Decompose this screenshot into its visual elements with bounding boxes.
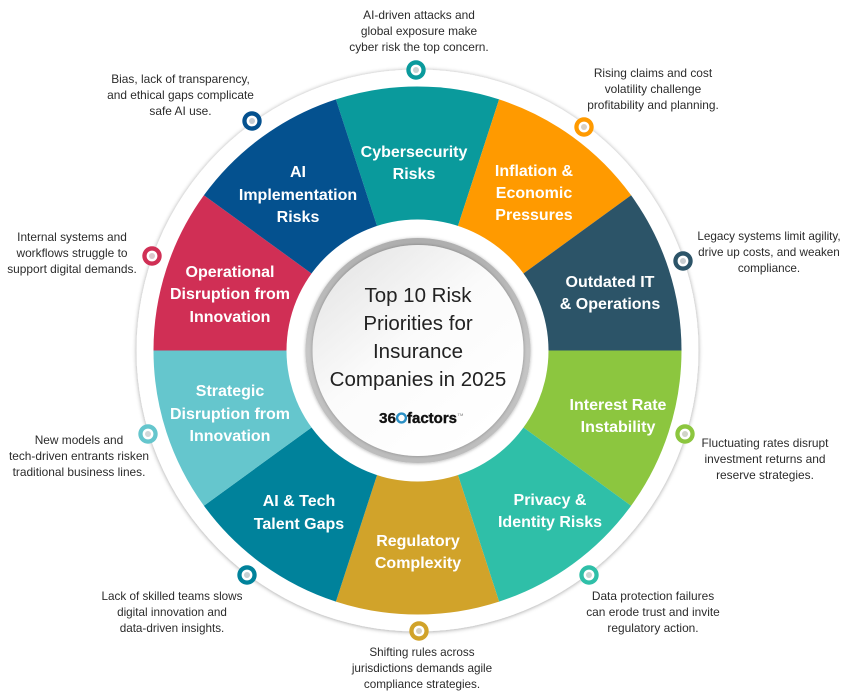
text: Regulatory: jurisdictions demands agile: [351, 662, 492, 675]
dot: Privacy: [579, 565, 599, 585]
text: Privacy: regulatory action.: [607, 621, 699, 635]
dot: Operational: [142, 246, 162, 266]
white outer ring: [136, 70, 698, 632]
dot: Regulatory: [409, 621, 429, 641]
text: Inflation: profitability and planning.: [587, 98, 719, 112]
label: AI Implementation Risks: Implementation: [239, 187, 357, 204]
text: Cybersecurity: cyber risk the top concern.: [349, 40, 489, 54]
text: Outdated IT: drive up costs, and weaken: [698, 246, 840, 259]
segment: Inflation & Economic Pressures: [418, 99, 631, 351]
label: Privacy & Identity Risks: Privacy &: [514, 492, 587, 509]
title: Insurance: [373, 340, 463, 363]
hub white backing: [286, 220, 548, 482]
wheel segments: [154, 86, 682, 615]
label: Interest Rate Instability: Instability: [581, 419, 655, 436]
segment: Strategic Disruption from Innovation: [154, 350, 418, 506]
dot: Cybersecurity: [406, 60, 426, 80]
segment: Outdated IT & Operations: [418, 195, 682, 350]
logo: 36 factors: TM: [458, 412, 463, 417]
label: AI & Tech Talent Gaps: AI & Tech: [263, 493, 335, 510]
label: Cybersecurity Risks: Risks: [393, 166, 435, 183]
segment: Privacy & Identity Risks: [418, 350, 631, 602]
logo: 36 factors: factors: [407, 410, 457, 427]
text: Cybersecurity: global exposure make: [361, 24, 478, 38]
label: Regulatory Complexity: Complexity: [375, 555, 461, 572]
text: Talent: data-driven insights.: [120, 622, 224, 635]
text: Interest Rate: reserve strategies.: [716, 468, 814, 482]
text: Privacy: Data protection failures: [592, 589, 714, 603]
text: Strategic: tech-driven entrants risken: [9, 449, 149, 463]
text: Outdated IT: compliance.: [738, 262, 800, 275]
label: AI & Tech Talent Gaps: Talent Gaps: [254, 516, 344, 533]
text: Cybersecurity: AI-driven attacks and: [363, 8, 475, 22]
label: Inflation & Economic Pressures: Pressures: [495, 207, 573, 224]
text: Regulatory: compliance strategies.: [364, 678, 480, 691]
dot: Outdated IT: [673, 251, 693, 271]
logo: 36 factors: [379, 410, 463, 427]
dot: AI Implementation: [242, 111, 262, 131]
label: Inflation & Economic Pressures: Inflation &: [495, 163, 574, 180]
text: Talent: Lack of skilled teams slows: [102, 590, 243, 603]
label: Privacy & Identity Risks: Identity Risks: [498, 514, 602, 531]
label: Strategic Disruption from Innovation: Strategic: [196, 383, 264, 400]
label: Inflation & Economic Pressures: Economic: [496, 185, 572, 202]
text: Operational: support digital demands.: [7, 262, 137, 276]
text: Operational: workflows struggle to: [15, 246, 128, 260]
dot: Strategic: [138, 424, 158, 444]
text: Strategic: traditional business lines.: [13, 465, 145, 479]
text: Inflation: volatility challenge: [605, 82, 702, 96]
text: AI Implementation: Bias, lack of transparency,: [111, 72, 250, 86]
dot: Interest Rate: [675, 424, 695, 444]
label: AI Implementation Risks: AI: [290, 164, 306, 181]
label: Operational Disruption from Innovation: Disruption from: [170, 286, 290, 303]
dot: Talent: [237, 565, 257, 585]
segment labels: [170, 144, 667, 572]
centre hub: [286, 220, 548, 482]
text: Outdated IT: Legacy systems limit agility,: [697, 230, 841, 243]
label: Operational Disruption from Innovation: Operational: [186, 264, 274, 281]
text: Privacy: can erode trust and invite: [586, 605, 720, 619]
text: AI Implementation: and ethical gaps complicate: [107, 88, 254, 102]
title: Priorities for: [363, 312, 473, 335]
text: Inflation: Rising claims and cost: [594, 66, 713, 80]
label: AI Implementation Risks: Risks: [277, 209, 319, 226]
text: Regulatory: Shifting rules across: [369, 646, 475, 659]
label: Outdated IT & Operations: Outdated IT: [566, 274, 655, 291]
label: Cybersecurity Risks: Cybersecurity: [361, 144, 467, 161]
text: Operational: Internal systems and: [17, 230, 127, 244]
segment: AI & Tech Talent Gaps: [204, 350, 418, 602]
title: Top 10 Risk: [364, 284, 472, 307]
label: Strategic Disruption from Innovation: Innovation: [190, 428, 270, 445]
hub grey ring: [306, 238, 530, 463]
logo: 36 factors: 36: [379, 411, 396, 427]
segment: Interest Rate Instability: [418, 350, 682, 506]
label: Outdated IT & Operations: & Operations: [560, 296, 660, 313]
hub inner disc: [312, 245, 524, 456]
label: Interest Rate Instability: Interest Rate: [570, 397, 667, 414]
title: Companies in 2025: [330, 368, 506, 391]
marker dots: [138, 60, 695, 641]
text: AI Implementation: safe AI use.: [149, 104, 212, 118]
text: Talent: digital innovation and: [117, 606, 227, 619]
label: Operational Disruption from Innovation: Innovation: [190, 309, 270, 326]
segment: Regulatory Complexity: [336, 350, 499, 615]
label: Strategic Disruption from Innovation: Disruption from: [170, 406, 290, 423]
text: Strategic: New models and: [35, 433, 123, 447]
dot: Inflation: [574, 117, 594, 137]
segment: Cybersecurity Risks: [336, 86, 499, 350]
text: Interest Rate: Fluctuating rates disrupt: [702, 436, 829, 450]
segment: AI Implementation Risks: [204, 99, 418, 351]
segment: Operational Disruption from Innovation: [154, 195, 418, 350]
label: Regulatory Complexity: Regulatory: [376, 533, 460, 550]
text: Interest Rate: investment returns and: [705, 452, 825, 466]
